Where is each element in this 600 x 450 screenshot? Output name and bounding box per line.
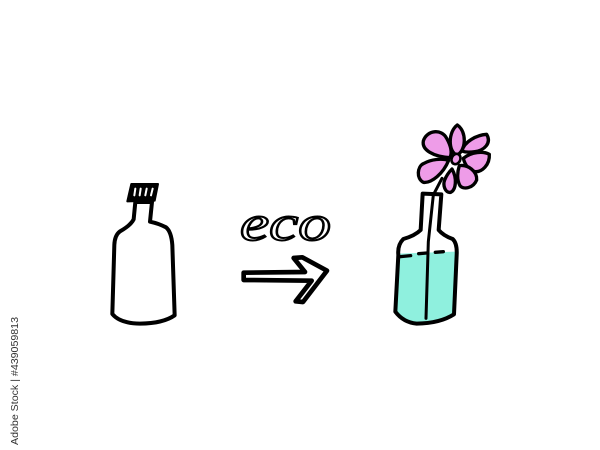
water: [396, 252, 455, 323]
water line dashes: [401, 252, 443, 257]
icon: vase with flower: [395, 125, 489, 324]
bottle cap: [127, 184, 158, 201]
flower: [418, 125, 489, 192]
flower centre: [450, 152, 462, 166]
vase outline: [395, 194, 457, 324]
icon: empty bottle: [112, 184, 175, 324]
petals: [450, 125, 464, 155]
arrow: [244, 257, 327, 302]
flower stem: [426, 178, 442, 318]
watermark: stock credit: Adobe Stock | #439059813: [9, 317, 21, 445]
vase body: [395, 194, 457, 324]
label: eco: eco: [240, 195, 331, 251]
